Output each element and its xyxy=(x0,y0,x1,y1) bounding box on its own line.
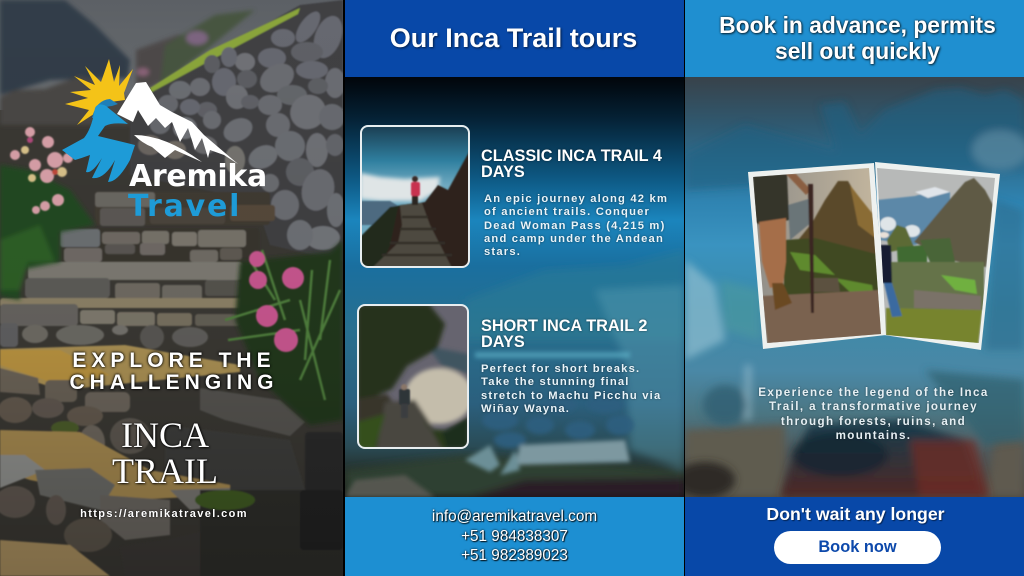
card: classic Inca Trail xyxy=(360,125,668,268)
logo: Aremika Travel xyxy=(62,59,267,224)
wall base xyxy=(130,0,343,262)
button: book now: Book now xyxy=(818,538,897,556)
call to action heading: Don't wait any longer xyxy=(766,504,945,524)
logo text: Aremika xyxy=(129,159,267,194)
photo: hiker on stone steps xyxy=(360,125,470,268)
card title: CLASSIC INCA TRAIL 4 DAYS xyxy=(481,147,662,181)
background: misted ruins xyxy=(345,77,684,497)
contact text: +51 982389023 xyxy=(461,547,568,564)
button: book now xyxy=(774,531,941,564)
footer: call to action xyxy=(685,497,1024,576)
card description: stretch to Machu Picchu via xyxy=(481,390,661,402)
website url: https://aremikatravel.com xyxy=(80,508,248,520)
footer: contact details xyxy=(345,497,684,576)
orange step xyxy=(0,345,240,390)
icon: sun, mountain and bird xyxy=(62,59,238,182)
panel: book in advance xyxy=(685,0,1024,576)
stairs xyxy=(95,192,270,225)
card description xyxy=(483,193,668,258)
heading: Book in advance, permits xyxy=(719,12,996,38)
contact text: +51 984838307 xyxy=(461,528,568,545)
heading: explore the challenging xyxy=(68,349,278,394)
panel: our Inca Trail tours xyxy=(345,0,684,576)
heading: explore the challenging: CHALLENGING xyxy=(70,371,278,394)
header bar xyxy=(685,0,1024,77)
photo: hiker above clouds xyxy=(357,304,469,449)
description text: mountains. xyxy=(836,429,911,442)
title: Inca Trail: TRAIL xyxy=(112,450,218,490)
card description: stars. xyxy=(484,246,521,258)
description text: Trail, a transformative journey xyxy=(769,400,978,413)
card description: An epic journey along 42 km xyxy=(484,193,668,205)
background photo: stone stairs xyxy=(0,0,343,576)
heading: Our Inca Trail tours xyxy=(390,23,637,53)
photo pair xyxy=(748,162,1000,539)
description text: through forests, ruins, and xyxy=(781,415,966,428)
heading: explore the challenging: EXPLORE THE xyxy=(72,349,276,372)
card description: Take the stunning final xyxy=(481,376,630,388)
card description: Perfect for short breaks. xyxy=(481,363,640,375)
background: misted Machu Picchu xyxy=(685,77,1024,497)
card description: and camp under the Andean xyxy=(484,233,664,245)
contact text: info@aremikatravel.com xyxy=(432,508,597,525)
description text: Experience the legend of the Inca xyxy=(758,386,989,399)
title: Inca Trail xyxy=(111,415,218,490)
heading xyxy=(719,12,998,66)
logo subtext: Travel xyxy=(128,189,241,224)
card: short Inca Trail xyxy=(357,304,661,449)
card description: Dead Woman Pass (4,215 m) xyxy=(484,220,666,232)
panel: trail photo with logo xyxy=(0,0,343,576)
title: Inca Trail: INCA xyxy=(121,415,209,455)
header bar xyxy=(345,0,684,77)
heading: sell out quickly xyxy=(775,38,940,64)
card description xyxy=(480,363,661,416)
card title: SHORT INCA TRAIL 2 DAYS xyxy=(481,317,647,351)
card description: of ancient trails. Conquer xyxy=(484,206,650,218)
photo: visitor overlooking citadel xyxy=(875,162,1000,350)
description text xyxy=(758,386,989,442)
card description: Wiñay Wayna. xyxy=(481,403,570,415)
greenery xyxy=(0,165,95,300)
photo: hiker at Machu Picchu xyxy=(748,163,886,350)
contact text xyxy=(431,508,598,564)
